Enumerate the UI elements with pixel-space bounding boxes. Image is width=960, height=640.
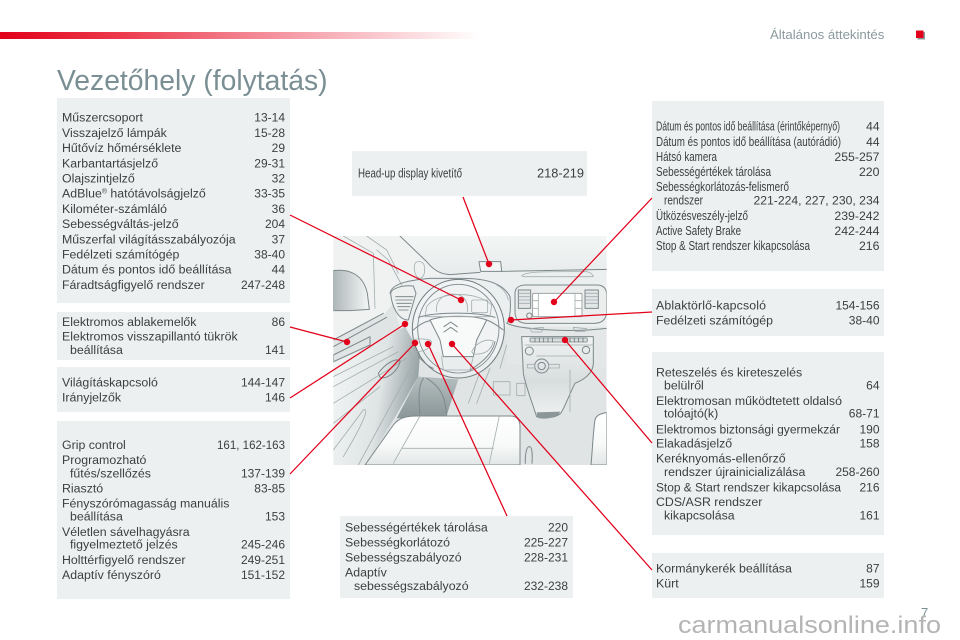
section heading: Általános áttekintés: Általános áttekintés	[770, 27, 885, 42]
lower dash	[510, 327, 606, 331]
panel: lower left controls: 83-85	[254, 481, 285, 495]
panel: lights	[57, 367, 290, 412]
panel: speed functions	[340, 516, 573, 598]
instrument cluster	[425, 294, 492, 317]
panel: lights: 146	[265, 391, 285, 405]
panel: date, camera and driving aids: Dátum és pontos idő beállítása (érintőképernyő)	[656, 119, 840, 134]
panel: date, camera and driving aids: Dátum és pontos idő beállítása (autórádió)	[656, 134, 841, 149]
panel: instruments: Visszajelző lámpák	[62, 126, 168, 140]
panel: lower left controls: beállítása	[70, 510, 123, 524]
panel: windows and mirrors: 86	[272, 315, 285, 329]
panel: wipers and trip computer	[652, 289, 884, 336]
pedals and interior lines	[419, 345, 570, 463]
panel: instruments: Dátum és pontos idő beállítása	[62, 263, 232, 277]
callout: date and driving aids	[551, 198, 652, 305]
panel: windows and mirrors: Elektromos visszapillantó tükrök	[62, 330, 238, 344]
windscreen and pillar lines	[333, 236, 607, 347]
panel: wipers and trip computer: Ablaktörlő-kapcsoló	[656, 298, 766, 312]
panel: instruments: Karbantartásjelző	[62, 156, 158, 170]
panel: wipers and trip computer: 38-40	[849, 313, 880, 327]
panel: locking and centre console: Elektromosan működtetett oldalsó	[656, 394, 842, 408]
head-up display unit	[479, 262, 502, 271]
steering wheel	[412, 279, 504, 378]
panel: lights: Irányjelzők	[62, 391, 122, 405]
callout lines and target dots	[290, 197, 652, 570]
panel: date, camera and driving aids: 255-257	[834, 150, 880, 164]
callout: head-up display	[463, 197, 492, 267]
panel: locking and centre console: 158	[859, 437, 880, 451]
panel: speed functions: Sebességértékek tárolása	[345, 521, 488, 535]
callout: lower left controls	[290, 340, 418, 474]
panel: head-up display	[352, 151, 587, 196]
panel: locking and centre console: kikapcsolása	[664, 508, 735, 522]
panel: lower left controls: figyelmeztető jelzés	[70, 537, 178, 551]
panel: instruments: 38-40	[254, 248, 285, 262]
cockpit illustration	[333, 236, 607, 465]
panel: instruments: 32	[272, 172, 285, 186]
panel: date, camera and driving aids: 44	[866, 135, 880, 149]
panel: lower left controls: Véletlen sávelhagyásra	[62, 525, 190, 539]
panel: lights: Világításkapcsoló	[62, 376, 158, 390]
panel: locking and centre console: belülről	[664, 378, 704, 392]
panel: steering wheel and horn	[652, 553, 884, 598]
panel: speed functions: Adaptív	[345, 566, 388, 580]
panel: lower left controls: Grip control	[62, 438, 126, 452]
door panel	[333, 327, 420, 465]
panel: instruments: AdBlue	[62, 187, 102, 201]
panel: wipers and trip computer: Fedélzeti számítógép	[656, 313, 773, 327]
panel: instruments: Sebességváltás-jelző	[62, 217, 179, 231]
panel: lower left controls: Adaptív fényszóró	[62, 568, 161, 582]
panel: speed functions: 228-231	[524, 551, 568, 565]
panel: instruments: 13-14	[254, 111, 285, 125]
panel: steering wheel and horn: 159	[859, 576, 880, 590]
callout: wipers	[508, 312, 652, 323]
seat right	[591, 413, 607, 465]
panel: locking and centre console	[652, 352, 884, 535]
panel: date, camera and driving aids: 221-224, 227, 230, 234	[753, 193, 880, 207]
panel: instruments: Fáradtságfigyelő rendszer	[62, 278, 205, 292]
panel: date, camera and driving aids	[652, 101, 884, 271]
panel: locking and centre console: rendszer újrainicializálása	[664, 465, 805, 479]
panel: instruments: Műszerfal világításszabályozója	[62, 232, 236, 246]
panel: locking and centre console: 64	[866, 378, 880, 392]
panel: locking and centre console: Reteszelés és kireteszelés	[656, 366, 802, 380]
panel: instruments	[57, 98, 290, 303]
panel: instruments: Kilométer-számláló	[62, 202, 167, 216]
panel: instruments: Fedélzeti számítógép	[62, 248, 179, 262]
panel: locking and centre console: CDS/ASR rendszer	[656, 495, 762, 509]
callout: windows	[290, 327, 350, 345]
windscreen area	[400, 236, 607, 274]
panel: instruments: 15-28	[254, 126, 285, 140]
panel: lower left controls: 153	[265, 510, 285, 524]
panel: date, camera and driving aids: Hátsó kamera	[656, 149, 718, 164]
panel: instruments: 36	[272, 202, 285, 216]
callout: lights	[290, 321, 408, 398]
panel: lower left controls: 161, 162-163	[217, 438, 285, 452]
panel: instruments: Hűtővíz hőmérséklete	[62, 141, 182, 155]
panel: lower left controls: 245-246	[241, 537, 285, 551]
panel: instruments: 37	[272, 232, 285, 246]
panel: instruments: Olajszintjelző	[62, 172, 135, 186]
panel: instruments: 44	[272, 263, 285, 277]
panel: windows and mirrors: beállítása	[70, 343, 123, 357]
panel: lower left controls: 137-139	[241, 466, 285, 480]
panel: locking and centre console: 190	[859, 422, 880, 436]
central screen and vents	[515, 285, 607, 332]
panel: lower left controls: 249-251	[241, 553, 285, 567]
callout: console	[562, 337, 652, 443]
panel: locking and centre console: Keréknyomás-ellenőrző	[656, 451, 786, 465]
panel: date, camera and driving aids: rendszer	[664, 192, 704, 207]
panel: steering wheel and horn: Kürt	[656, 576, 679, 590]
panel: date, camera and driving aids: Sebességkorlátozás-felismerő	[656, 179, 789, 194]
panel: locking and centre console: tolóajtó(k)	[664, 407, 718, 421]
panel: date, camera and driving aids: 44	[866, 120, 880, 134]
panel: lower left controls: Holttérfigyelő rendszer	[62, 553, 186, 567]
panel: locking and centre console: 161	[859, 508, 880, 522]
panel: windows and mirrors: Elektromos ablakemelők	[62, 315, 197, 329]
panel: instruments: 204	[265, 217, 285, 231]
side window and pillar	[333, 236, 443, 340]
panel: lights: 144-147	[241, 376, 285, 390]
panel: windows and mirrors	[57, 312, 290, 360]
seat left	[365, 416, 520, 465]
door mirror	[333, 270, 369, 311]
panel: lower left controls: 151-152	[241, 568, 285, 582]
panel: locking and centre console: Elektromos biztonsági gyermekzár	[656, 422, 840, 436]
panel: lower left controls: Riasztó	[62, 481, 103, 495]
panel: date, camera and driving aids: 242-244	[834, 224, 880, 238]
panel: instruments: Műszercsoport	[62, 111, 144, 125]
dashboard	[396, 271, 606, 340]
panel: instruments: hatótávolságjelző	[107, 187, 206, 201]
panel: speed functions: 225-227	[524, 536, 568, 550]
panel: speed functions: Sebességszabályozó	[345, 551, 462, 565]
red square marker	[916, 30, 925, 40]
left air vent	[391, 286, 416, 320]
watermark: carmanualsonline.info	[678, 612, 941, 639]
panel: instruments: 29-31	[254, 156, 285, 170]
panel: windows and mirrors: 141	[265, 343, 285, 357]
panel: date, camera and driving aids: Active Safety Brake	[656, 223, 741, 238]
panel: date, camera and driving aids: 216	[859, 239, 880, 253]
seat detail lines	[393, 416, 499, 463]
panel: date, camera and driving aids: Sebességértékek tárolása	[656, 164, 772, 179]
panel: locking and centre console: 68-71	[849, 407, 880, 421]
panel: instruments: 29	[272, 141, 285, 155]
panel: lower left controls: fűtés/szellőzés	[70, 466, 151, 480]
panel: wipers and trip computer: 154-156	[835, 298, 880, 312]
header gradient bar	[0, 32, 480, 39]
panel: instruments: 33-35	[254, 187, 285, 201]
console controls	[525, 338, 593, 419]
panel: date, camera and driving aids: Ütközésveszély-jelző	[656, 208, 748, 223]
panel: head-up display: Head-up display kivetítő	[358, 166, 462, 180]
panel: speed functions: Sebességkorlátozó	[345, 536, 450, 550]
panel: locking and centre console: Stop & Start rendszer kikapcsolása	[656, 481, 841, 495]
panel: speed functions: sebességszabályozó	[354, 579, 469, 593]
panel: date, camera and driving aids: 220	[859, 165, 880, 179]
panel: speed functions: 220	[548, 521, 568, 535]
title: Vezetőhely (folytatás)	[57, 64, 328, 96]
panel: date, camera and driving aids: 239-242	[834, 209, 880, 223]
panel: instruments: ®	[102, 188, 108, 196]
panel: locking and centre console: Elakadásjelző	[656, 437, 732, 451]
footwell	[397, 377, 458, 418]
panel: lower left controls: Fényszórómagasság manuális	[62, 497, 229, 511]
panel: date, camera and driving aids: Stop & Start rendszer kikapcsolása	[656, 238, 811, 253]
callout: steering wheel	[449, 341, 652, 570]
panel: locking and centre console: 216	[859, 481, 880, 495]
panel: steering wheel and horn: Kormánykerék beállítása	[656, 561, 792, 575]
panel: speed functions: 232-238	[524, 579, 568, 593]
callout: instruments	[290, 215, 464, 303]
panel: locking and centre console: 258-260	[835, 465, 880, 479]
panel: instruments: 247-248	[241, 278, 285, 292]
panel: steering wheel and horn: 87	[866, 561, 880, 575]
panel: head-up display: 218-219	[537, 166, 584, 180]
door handle and pockets	[333, 337, 412, 465]
page number: 7	[921, 605, 928, 620]
panel: lower left controls: Programozható	[62, 453, 147, 467]
centre console	[522, 337, 593, 418]
panel: lower left controls	[57, 421, 290, 599]
callout: speed functions	[425, 341, 507, 516]
brand chevrons	[444, 322, 457, 332]
